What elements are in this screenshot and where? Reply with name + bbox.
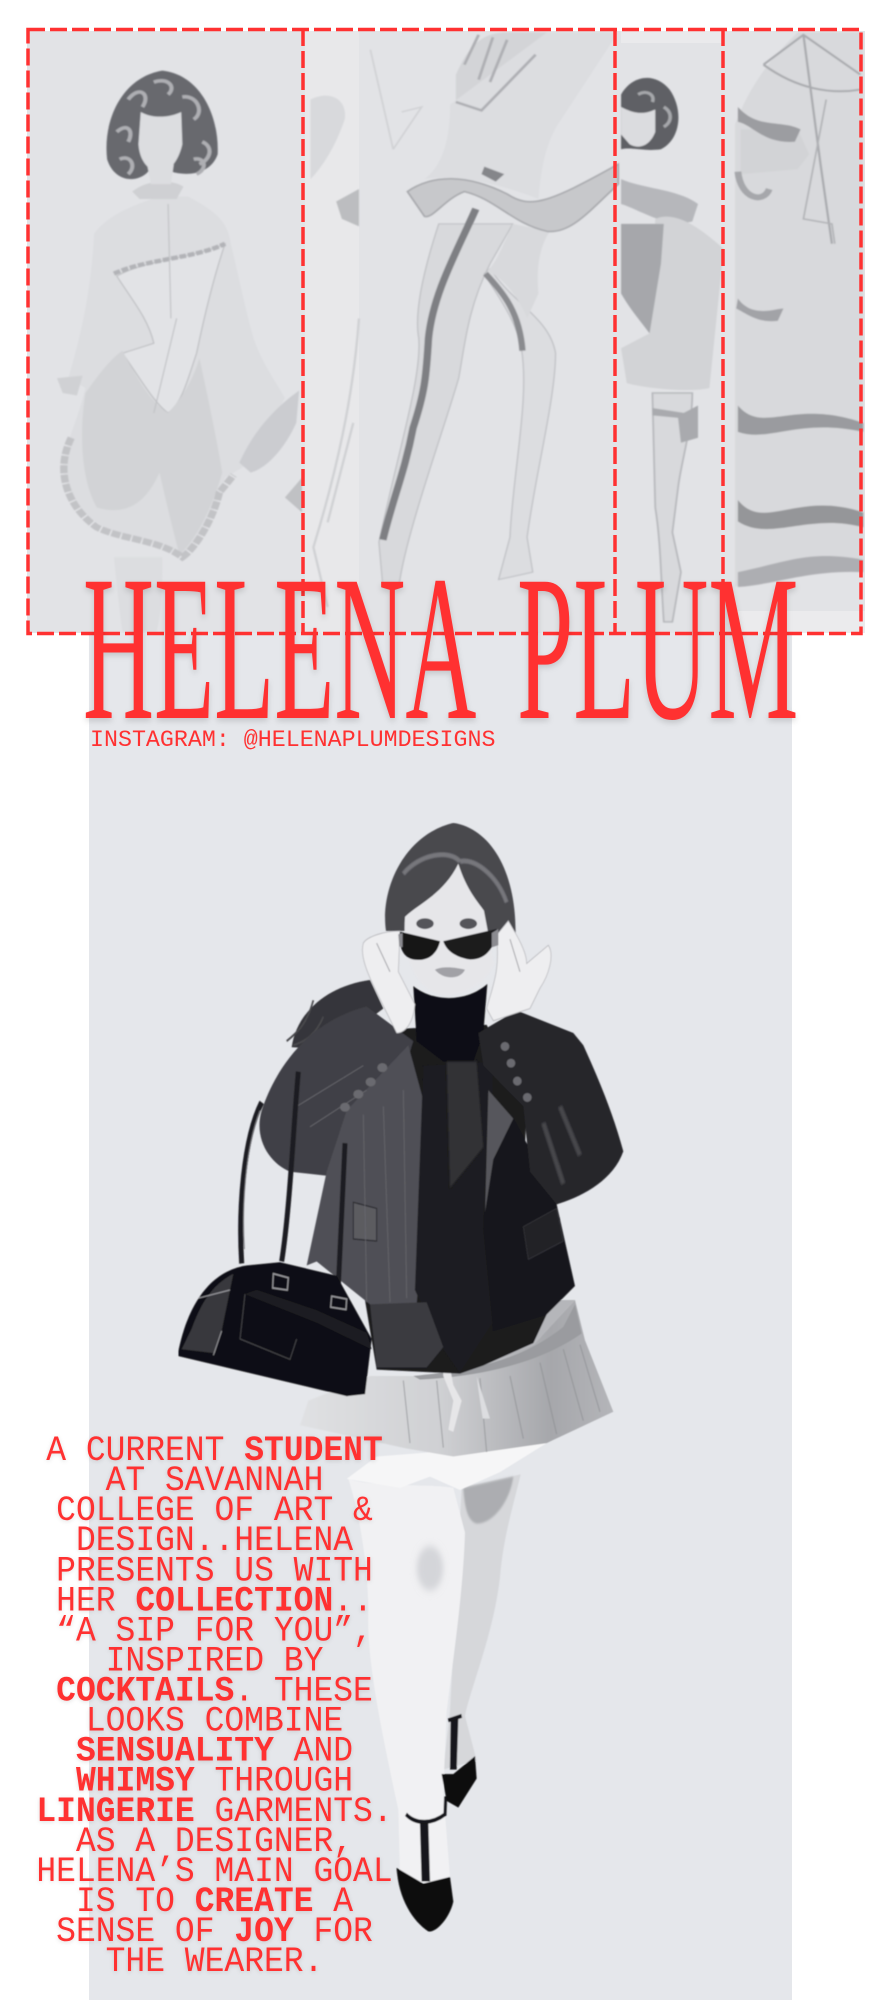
- title: HELENA: [83, 534, 476, 764]
- text block: biography: HELENA’S MAIN GOAL: [36, 1853, 393, 1892]
- text block: biography: WHIMSY THROUGH: [76, 1763, 353, 1802]
- text block: biography: INSPIRED BY: [106, 1643, 323, 1682]
- text block: biography: [36, 1432, 393, 1983]
- text block: biography: LINGERIE GARMENTS.: [36, 1793, 393, 1832]
- collar and shirt: [413, 984, 487, 1062]
- text block: biography: HER COLLECTION..: [56, 1582, 373, 1622]
- instagram handle: INSTAGRAM: @HELENAPLUMDESIGNS: [90, 727, 495, 753]
- photo: legs and skirt: [300, 1300, 613, 1932]
- sketch: figure one, ruffled bodysuit: [57, 71, 299, 632]
- eyes: [416, 918, 434, 929]
- hands: [362, 931, 415, 1033]
- left jacket panel: [307, 1045, 428, 1304]
- photo: jacket, bag and head: [178, 823, 623, 1396]
- text block: biography: AT SAVANNAH: [106, 1462, 323, 1501]
- right sleeve: [478, 1011, 623, 1204]
- hair: [385, 823, 516, 947]
- bag straps: [241, 1072, 345, 1286]
- text block: biography: DESIGN..HELENA: [76, 1522, 354, 1562]
- text block: biography: THE WEARER.: [106, 1943, 323, 1983]
- photo: designer portrait: [178, 823, 623, 1932]
- jacket buttons: [340, 1042, 532, 1112]
- photo backdrop panel: [89, 630, 792, 2000]
- text block: biography: SENSUALITY AND: [76, 1733, 353, 1772]
- text block: biography: IS TO CREATE A: [76, 1883, 354, 1922]
- text block: biography: A CURRENT STUDENT: [46, 1432, 383, 1471]
- lower shirt tail: [370, 1302, 443, 1368]
- jacket underlayer: [363, 1025, 547, 1374]
- text block: biography: PRESENTS US WITH: [56, 1552, 373, 1592]
- right jacket panel: [483, 1098, 575, 1331]
- text block: biography: AS A DESIGNER,: [76, 1823, 353, 1862]
- sketch: figure two, legs with seamed stockings: [285, 32, 618, 607]
- left sleeve: [259, 1006, 413, 1176]
- title: [83, 534, 798, 764]
- sketch: figure three, corset with garter: [621, 78, 724, 622]
- mouth: [435, 967, 465, 977]
- text block: biography: COLLEGE OF ART &: [56, 1492, 373, 1531]
- text block: biography: COCKTAILS. THESE: [56, 1673, 373, 1712]
- sunglasses: [400, 932, 440, 960]
- text block: biography: “A SIP FOR YOU”,: [56, 1613, 373, 1652]
- title: PLUM: [517, 534, 798, 764]
- panel: sketch strip: [27, 31, 865, 633]
- loose back hair: [292, 980, 383, 1049]
- face: [405, 864, 494, 995]
- text block: biography: SENSE OF JOY FOR: [56, 1913, 373, 1952]
- shoes: [397, 1868, 453, 1932]
- dashed frame with dividers: [28, 29, 861, 634]
- text block: biography: LOOKS COMBINE: [86, 1703, 343, 1742]
- bag body: [178, 1262, 372, 1396]
- sketch: figure four, tiered gown: [735, 32, 863, 587]
